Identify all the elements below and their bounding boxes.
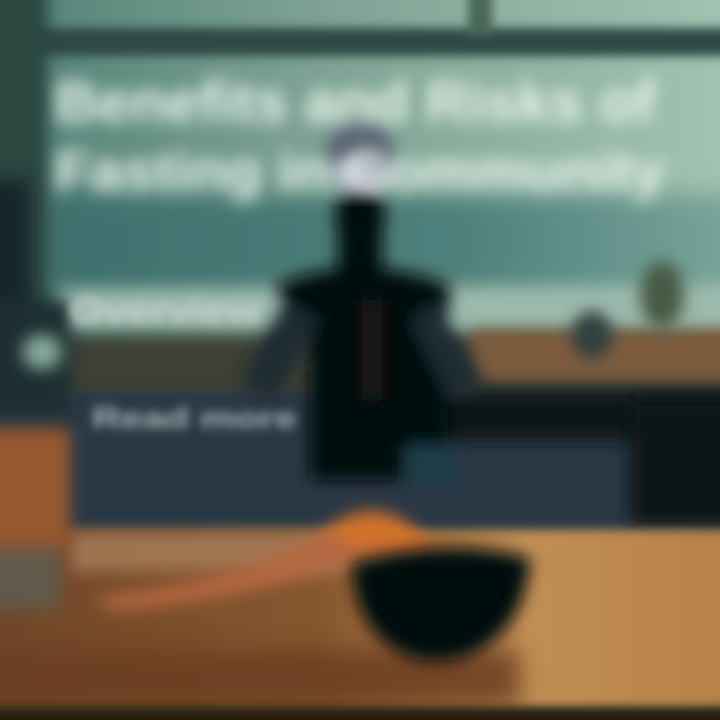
background: wooden table	[0, 530, 720, 720]
title line 1: Benefits and Risks of	[55, 70, 656, 135]
caption: Read more	[92, 402, 297, 435]
icon: glass	[0, 428, 70, 608]
subtitle: Overview	[70, 292, 261, 330]
icon: black bowl	[352, 548, 530, 661]
background: window scene	[0, 0, 720, 380]
title line 2: Fasting in Community	[55, 139, 665, 202]
carrot on table	[95, 511, 435, 610]
background: dark band	[0, 300, 720, 530]
background: ledge	[0, 261, 720, 400]
figure: meditating person	[240, 122, 485, 485]
